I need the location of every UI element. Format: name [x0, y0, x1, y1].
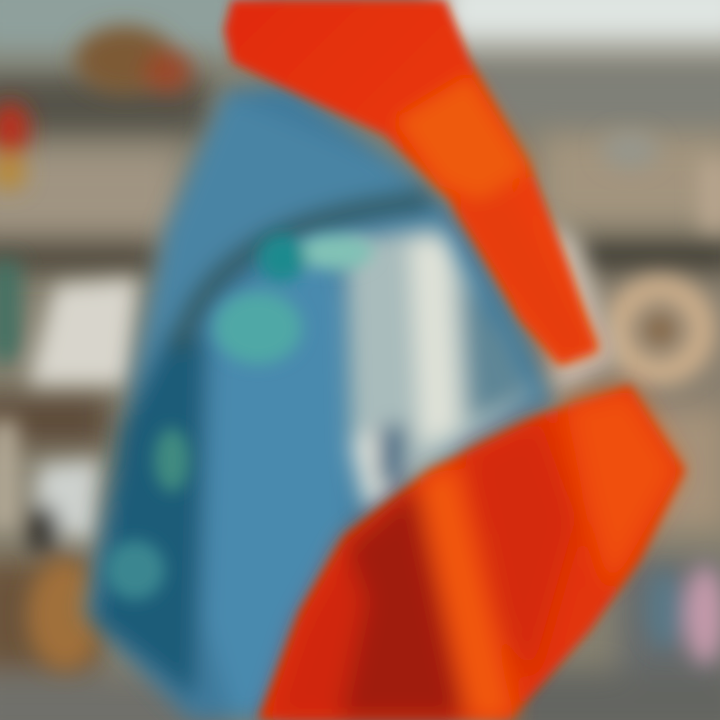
scarf: red upper drape [224, 0, 598, 365]
cloth: pale inner panel [345, 220, 615, 510]
cloth: blue body [85, 85, 555, 720]
cloth: teal patches [105, 234, 373, 600]
scarf: orange lower drape [258, 385, 685, 720]
